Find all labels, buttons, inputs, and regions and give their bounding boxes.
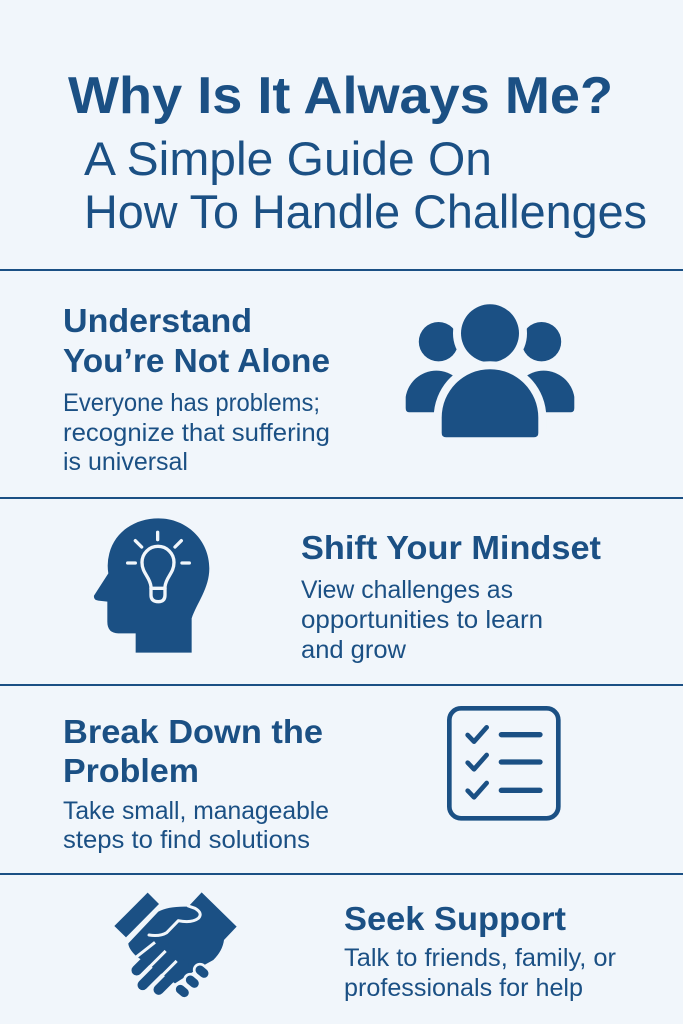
heading: understand you're not alone: [63, 302, 330, 379]
text: everyone has problems: recognize that suffering: [63, 419, 330, 447]
icon: checklist: [449, 708, 558, 818]
text: talk to friends: Talk to friends, family, or: [344, 944, 616, 972]
icon: group of people: [406, 304, 574, 437]
text: view challenges: opportunities to learn: [301, 606, 543, 634]
title: A Simple Guide On: [84, 132, 492, 185]
text: take small steps: [63, 797, 329, 854]
heading: break down the problem: [63, 713, 323, 789]
heading: seek support: Seek Support: [344, 900, 566, 937]
heading: break down the problem: Problem: [63, 752, 199, 789]
title: Why Is It Always Me?: [68, 67, 613, 125]
icon: handshake: [114, 892, 237, 993]
title: [68, 67, 647, 238]
title: How To Handle Challenges: [84, 185, 647, 238]
text: talk to friends: [344, 944, 616, 1002]
text: take small steps: Take small, manageable: [63, 797, 329, 825]
text: everyone has problems: [63, 389, 330, 476]
text: view challenges: and grow: [301, 636, 407, 664]
text: view challenges: [301, 576, 543, 664]
panel: shift your mindset: [94, 518, 601, 664]
heading: shift your mindset: Shift Your Mindset: [301, 529, 601, 566]
icon: head with light bulb: [94, 518, 209, 653]
text: everyone has problems: is universal: [63, 448, 188, 476]
heading: understand you're not alone: You’re Not Alone: [63, 342, 330, 379]
text: take small steps: steps to find solutions: [63, 826, 310, 854]
heading: understand you're not alone: Understand: [63, 302, 252, 339]
text: everyone has problems: Everyone has problems;: [63, 389, 320, 417]
panel: break down the problem: [63, 708, 558, 854]
panel: understand you're not alone: [63, 302, 574, 476]
text: talk to friends: professionals for help: [344, 974, 583, 1002]
heading: break down the problem: Break Down the: [63, 713, 323, 750]
text: view challenges: View challenges as: [301, 576, 513, 604]
panel: seek support: [114, 892, 616, 1002]
